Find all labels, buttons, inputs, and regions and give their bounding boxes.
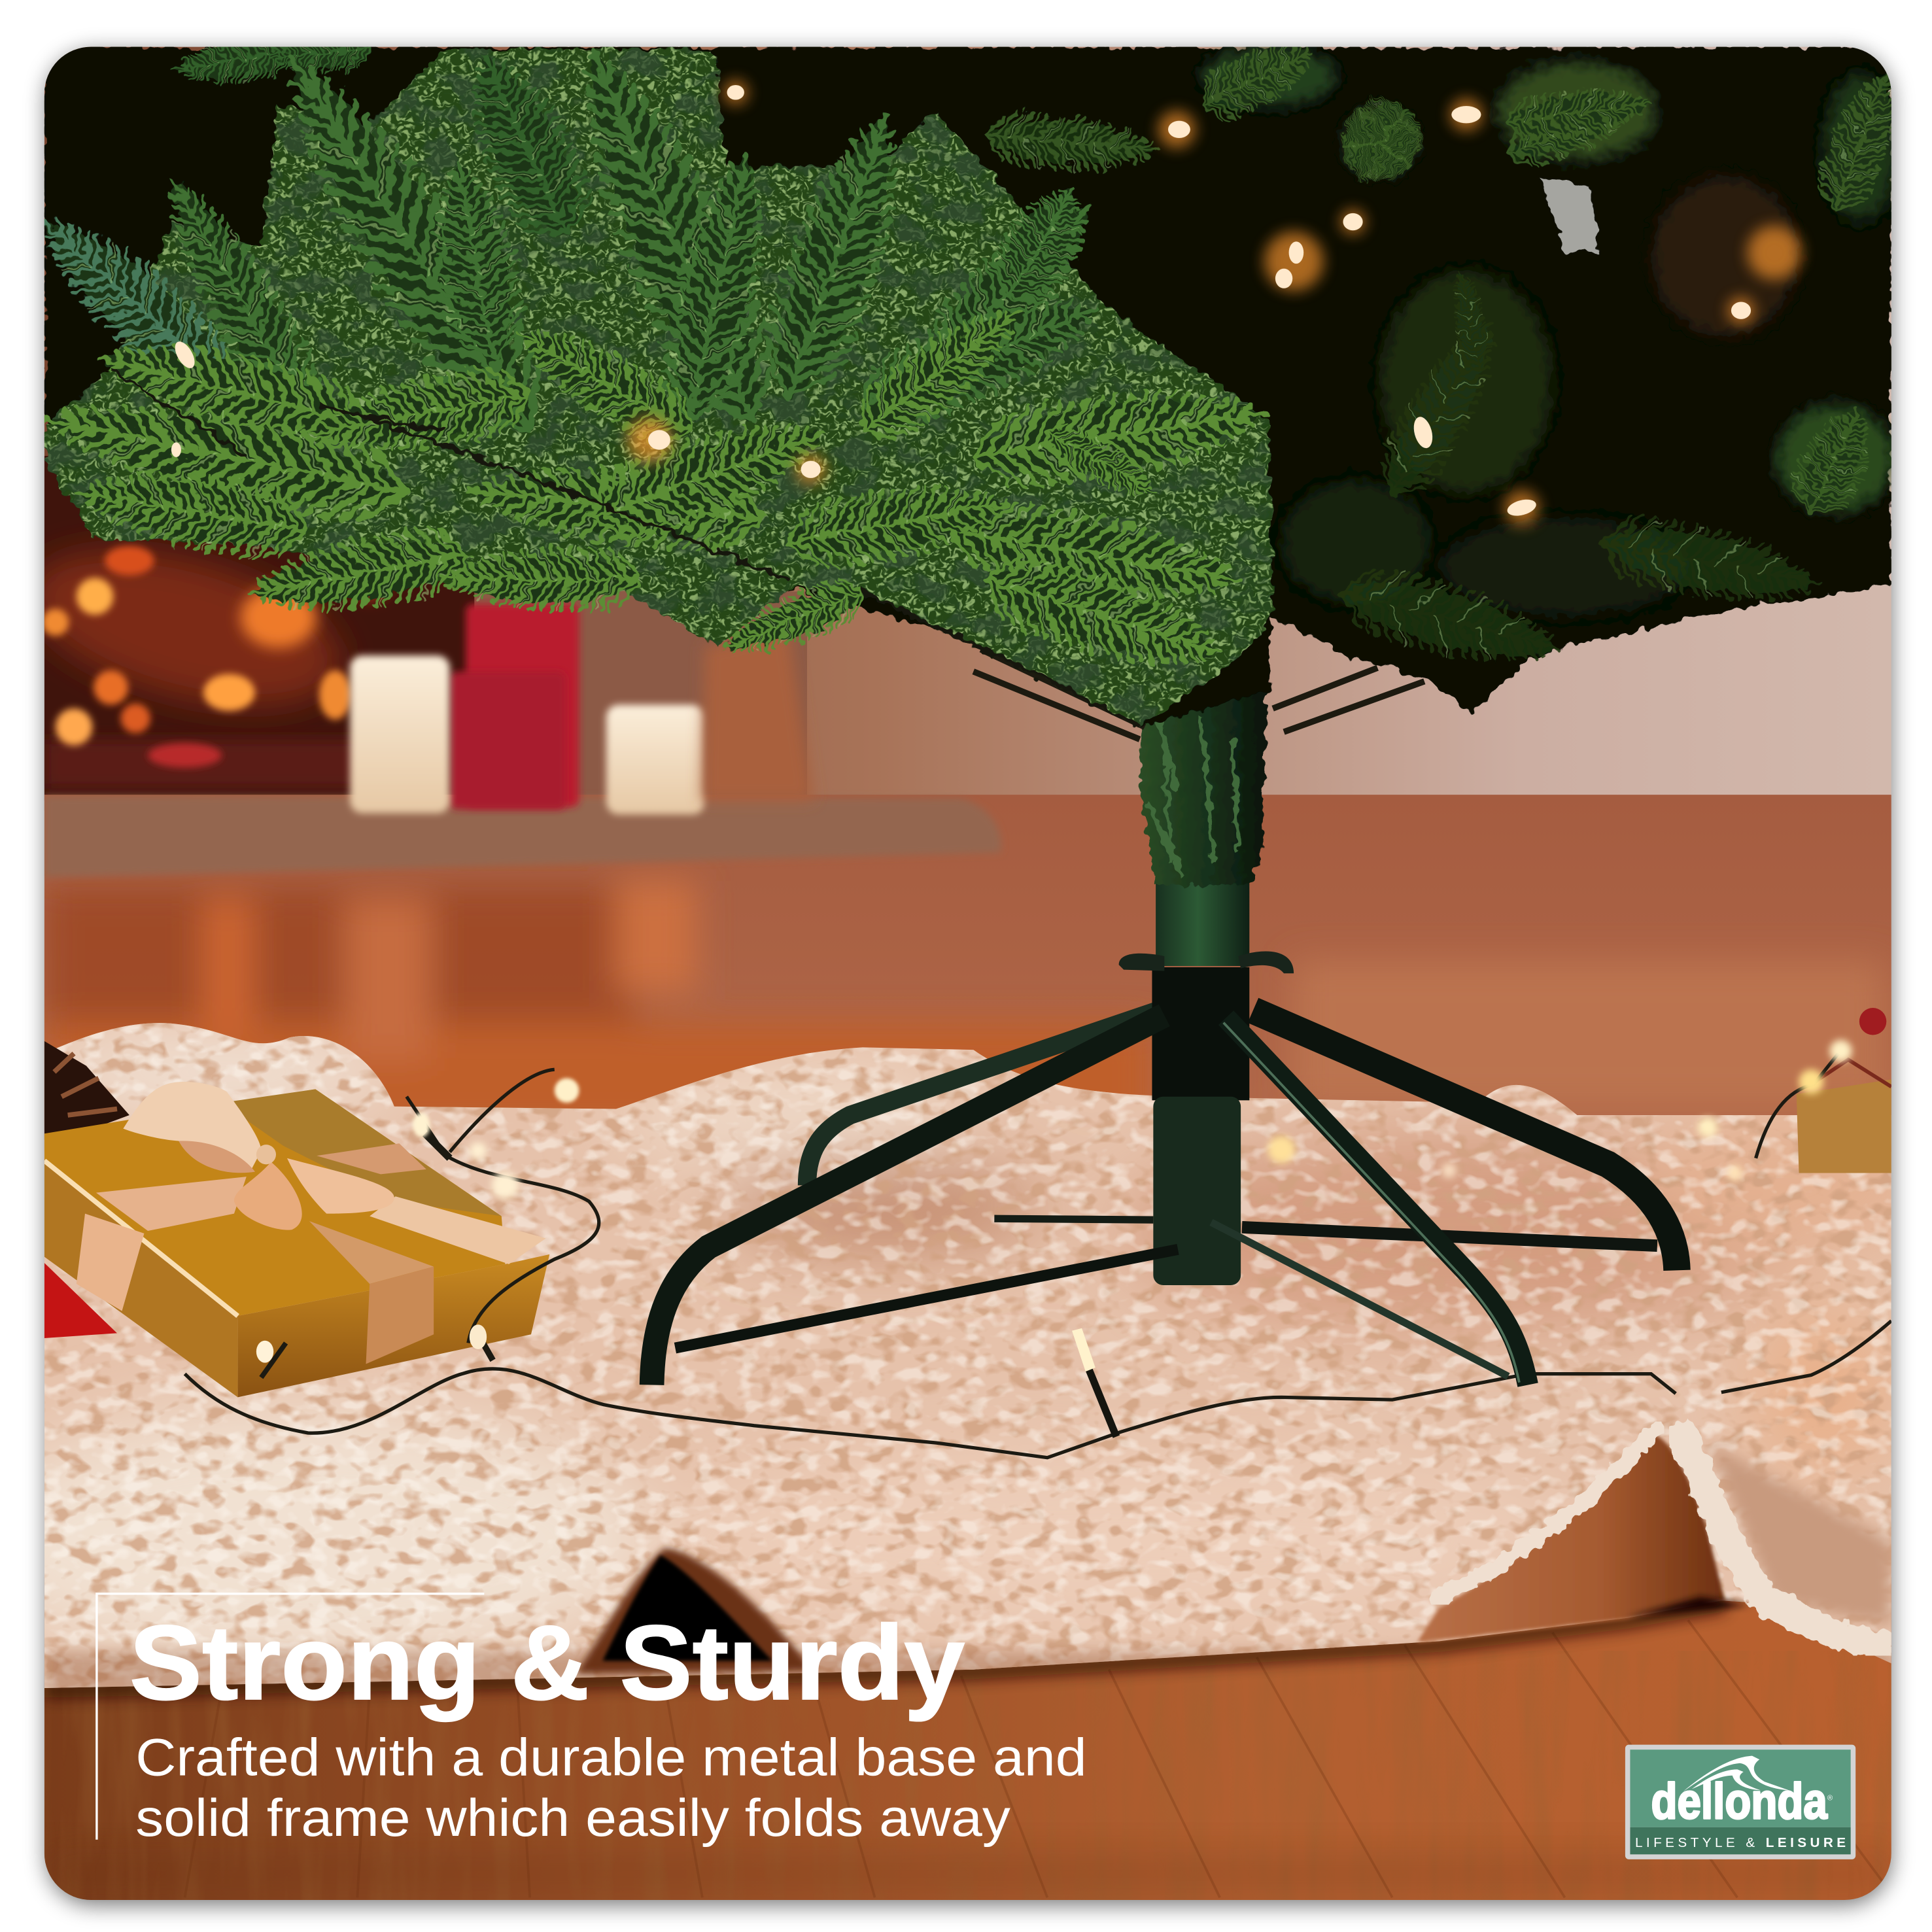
logo tagline: LIFESTYLE & LEISURE [1635, 1835, 1846, 1850]
red wrap behind gift [44, 1263, 117, 1338]
central tube [1152, 967, 1249, 1100]
tree foliage [18, 27, 1912, 737]
fireplace background with bokeh lights [12, 456, 807, 813]
green pole [1156, 877, 1249, 966]
logo wave [1683, 1756, 1789, 1791]
heading: Strong & Sturdy [129, 1604, 965, 1722]
polished floor, upper [44, 795, 1891, 1152]
silver branch glint [1540, 179, 1599, 252]
right fronds [984, 28, 1912, 525]
bow loops [123, 1082, 261, 1172]
right face [238, 1254, 549, 1397]
left face [44, 1161, 238, 1397]
ledge rug [44, 796, 1001, 877]
dark canopy mass [44, 47, 1891, 727]
title block with corner rule [97, 1594, 1087, 1848]
shadow line under blanket [44, 1604, 1725, 1691]
top small fronds [171, 27, 605, 252]
logo: dellonda [1625, 1745, 1855, 1859]
description line 1: Crafted with a durable metal base and [135, 1729, 1087, 1787]
top face [44, 1089, 505, 1316]
front legs [652, 1015, 1164, 1385]
string lights wire [185, 1054, 1891, 1458]
tree trunk wrap [1140, 629, 1269, 885]
needle speckle [44, 47, 1289, 737]
right blanket fold [1417, 1423, 1891, 1649]
blanket light bulbs [256, 1040, 1852, 1437]
registered mark: ® [1827, 1794, 1833, 1802]
description line 2: solid frame which easily folds away [135, 1789, 1010, 1848]
long back fronds [143, 30, 1116, 458]
bright mid fronds [36, 286, 1272, 689]
floor reflections [44, 881, 1885, 1133]
back struts [994, 1218, 1153, 1220]
right gift and berries [1797, 1008, 1891, 1173]
teal-ish frond top left [18, 194, 247, 410]
lower wood floor [44, 1577, 1891, 1900]
right side dim patches [1201, 47, 1897, 616]
pine cone [44, 1041, 129, 1140]
stem lines [111, 370, 1140, 727]
silver edge highlight [44, 1161, 238, 1316]
back wall [44, 47, 1891, 811]
tree fairy lights [171, 80, 1801, 525]
candles [350, 604, 813, 814]
left blanket fold [577, 1547, 813, 1673]
logo wordmark: dellonda [1651, 1774, 1828, 1830]
clamp bolts [1119, 954, 1164, 971]
back legs [807, 1010, 1158, 1185]
knit blanket [0, 1010, 1932, 1700]
green mass [44, 49, 1273, 727]
ribbon bands [96, 1177, 247, 1231]
metal tree stand [652, 877, 1677, 1385]
corner rule [97, 1594, 484, 1840]
front struts [675, 1249, 1178, 1348]
gold gift with ribbon [44, 1082, 549, 1397]
lower twigs [973, 649, 1424, 739]
